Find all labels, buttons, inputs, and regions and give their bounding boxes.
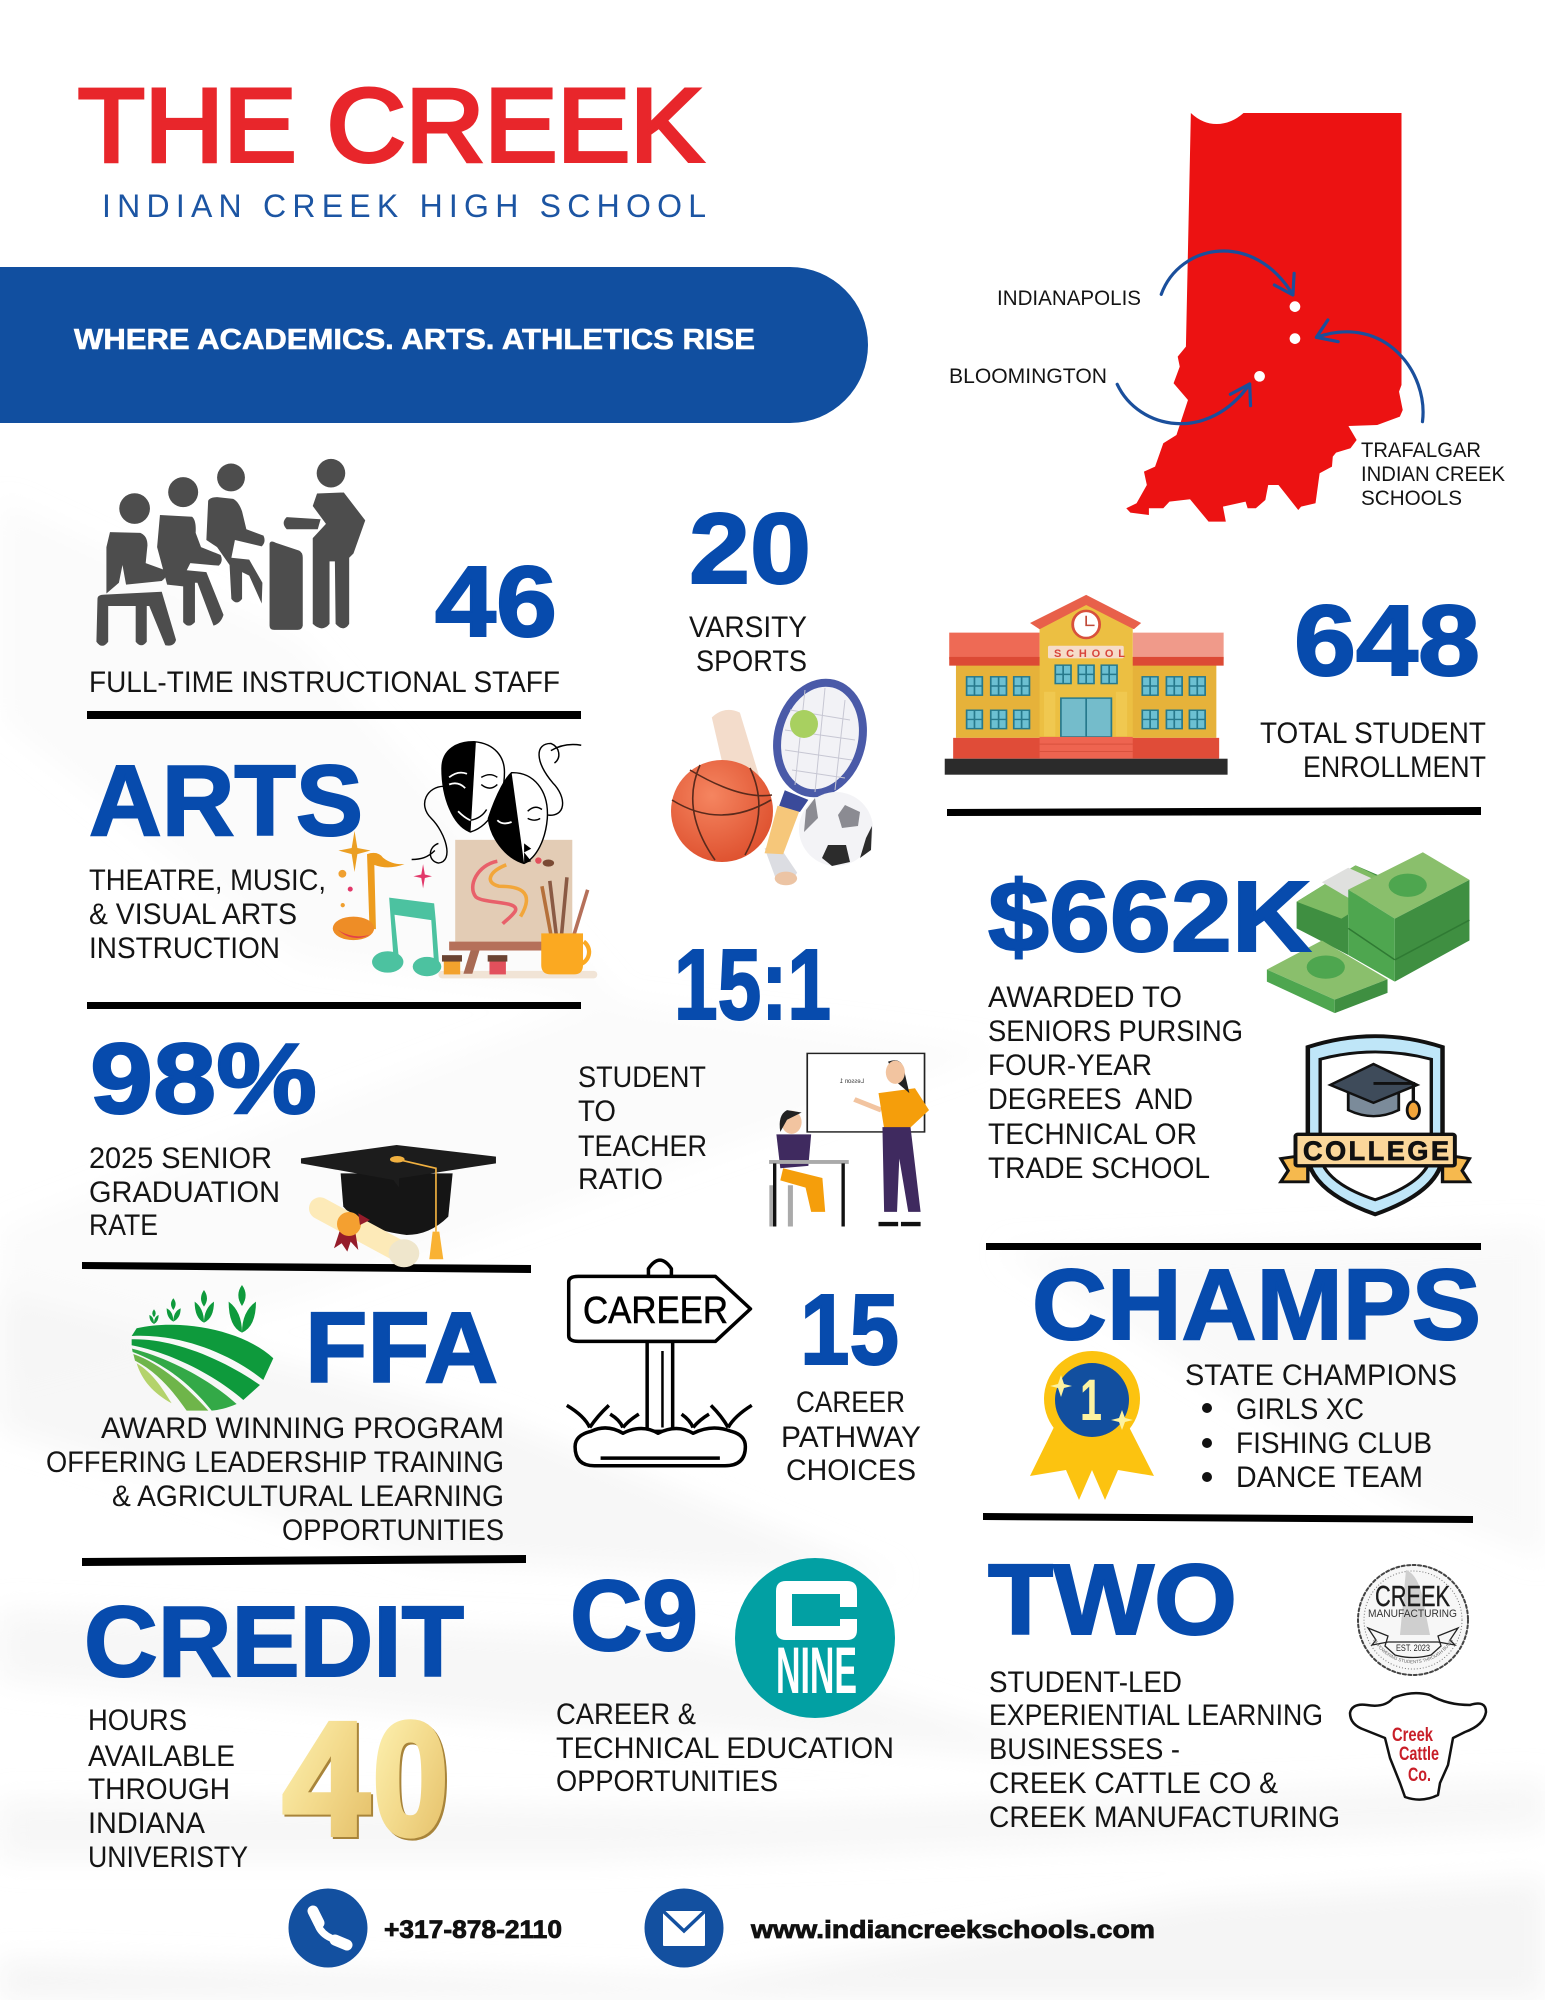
text: FFA description: OPPORTUNITIES: [282, 1514, 504, 1547]
footer: phone: +317-878-2110: [384, 1916, 562, 1944]
text: graduation rate: 2025 SENIOR: [89, 1142, 272, 1175]
icon: classroom: [769, 1053, 929, 1226]
text: student-led businesses: EXPERIENTIAL LEARNING: [989, 1699, 1323, 1732]
stat: 648: 648: [1294, 585, 1480, 697]
text: career and technical education: [556, 1698, 894, 1798]
banner: [0, 267, 868, 423]
text: awarded to seniors: TRADE SCHOOL: [988, 1152, 1210, 1185]
text: total student enrollment: TOTAL STUDENT: [1260, 717, 1486, 750]
text: FFA description: & AGRICULTURAL LEARNING: [112, 1480, 504, 1513]
text: state champions list: DANCE TEAM: [1236, 1461, 1423, 1494]
label: Bloomington: BLOOMINGTON: [949, 365, 1107, 388]
icon: school building: [945, 595, 1228, 775]
text: total student enrollment: ENROLLMENT: [1303, 751, 1486, 784]
text: state champions list: FISHING CLUB: [1236, 1427, 1432, 1460]
text: career pathway choices: CHOICES: [786, 1454, 916, 1487]
icon: seated people and teacher: [96, 459, 365, 646]
icon: sports equipment: [671, 674, 874, 885]
icon: graduation cap and diploma: [301, 1145, 496, 1267]
text: career and technical education: TECHNICAL EDUCATION: [556, 1732, 894, 1765]
icon: gold 4.0: 0: [373, 1689, 448, 1868]
heading: FFA: FFA: [305, 1292, 498, 1404]
text: graduation rate: GRADUATION: [89, 1176, 280, 1209]
text: student-led businesses: STUDENT-LED: [989, 1666, 1182, 1699]
map: Indiana with locations: [949, 113, 1505, 522]
text: varsity sports: VARSITY: [689, 611, 807, 644]
icon: Creek Cattle Co cow head: Cattle: [1399, 1744, 1439, 1765]
icon: Creek Manufacturing seal: CREEK: [1375, 1581, 1450, 1613]
text: varsity sports: SPORTS: [696, 645, 807, 678]
text: state champions list: STATE CHAMPIONS: [1185, 1359, 1457, 1392]
label: Trafalgar: INDIAN CREEK: [1361, 463, 1505, 486]
footer: website: [644, 1888, 1155, 1968]
label: Trafalgar: TRAFALGAR: [1361, 439, 1481, 462]
icon: arts illustration: [333, 742, 597, 978]
icon: Creek Cattle Co cow head: [1350, 1693, 1486, 1800]
arrows: [1117, 251, 1423, 424]
text: arts description: [89, 864, 326, 965]
text: graduation rate: [89, 1142, 280, 1242]
text: awarded to seniors: SENIORS PURSING: [988, 1015, 1243, 1048]
text: arts description: INSTRUCTION: [89, 932, 280, 965]
board text: lesson: Lesson 1: [839, 1079, 864, 1085]
icon: gold 4.0: 4: [283, 1689, 369, 1868]
heading: CHAMPS: CHAMPS: [1032, 1249, 1481, 1361]
text: state champions list: GIRLS XC: [1236, 1393, 1364, 1426]
label: Indianapolis: INDIANAPOLIS: [997, 287, 1141, 310]
text: graduation rate: RATE: [89, 1209, 158, 1242]
text: total student enrollment: [1260, 717, 1486, 784]
footer: website: www.indiancreekschools.com: [750, 1916, 1155, 1944]
icon: Creek Manufacturing seal: EMPOWERING STUDENTS THROUGH BUSINESS: [1373, 1638, 1453, 1664]
icon: C Nine logo: [735, 1558, 895, 1718]
label: Trafalgar: SCHOOLS: [1361, 487, 1462, 510]
text: student to teacher ratio: TEACHER: [578, 1130, 707, 1163]
text: student to teacher ratio: RATIO: [578, 1163, 663, 1196]
stat: $662K: $662K: [988, 861, 1311, 973]
heading: arts: ARTS: [89, 745, 363, 857]
text: awarded to seniors: AWARDED TO: [988, 981, 1182, 1014]
text: awarded to seniors: [988, 981, 1243, 1185]
text: career and technical education: CAREER &: [556, 1698, 696, 1731]
heading: CREDIT: CREDIT: [84, 1586, 464, 1698]
icon: gold 4.0: [283, 1689, 448, 1868]
text: student-led businesses: CREEK CATTLE CO &: [989, 1767, 1278, 1800]
text: awarded to seniors: TECHNICAL OR: [988, 1118, 1197, 1151]
text: student to teacher ratio: [578, 1061, 707, 1196]
stat: 46: 46: [435, 546, 557, 658]
text: credit hours: [88, 1704, 248, 1874]
icon: career sign: [567, 1260, 752, 1466]
icon: farm field logo: [132, 1285, 273, 1411]
state shape: [1126, 113, 1403, 522]
stat: 15:1: 15:1: [674, 929, 831, 1041]
text: student to teacher ratio: STUDENT: [578, 1061, 706, 1094]
icon: first place ribbon: 1: [1080, 1368, 1102, 1433]
text: credit hours: HOURS: [88, 1704, 187, 1737]
text: career pathway choices: CAREER: [796, 1386, 905, 1419]
icon: Creek Manufacturing seal: EST. 2023: [1396, 1643, 1430, 1653]
stat: 15: 15: [800, 1274, 899, 1386]
text: FFA description: AWARD WINNING PROGRAM: [101, 1412, 504, 1445]
text: credit hours: INDIANA: [88, 1807, 205, 1840]
text: arts description: THEATRE, MUSIC,: [89, 864, 326, 897]
text: state champions list: [1185, 1359, 1457, 1494]
icon: C Nine logo: NINE: [776, 1633, 857, 1707]
text: credit hours: UNIVERISTY: [88, 1841, 248, 1874]
label: Trafalgar: [1361, 439, 1505, 510]
stat: C9: C9: [570, 1560, 698, 1672]
icon: Creek Manufacturing seal: MANUFACTURING: [1368, 1608, 1457, 1620]
text: full-time staff: FULL-TIME INSTRUCTIONAL STAFF: [89, 666, 560, 699]
icon: college badge: [1281, 1036, 1469, 1214]
stat: 98%: 98%: [90, 1023, 317, 1135]
icon: Creek Cattle Co cow head: Co.: [1408, 1765, 1431, 1786]
text: career pathway choices: PATHWAY: [781, 1421, 921, 1454]
stat: 20 varsity sports: 20: [689, 493, 811, 605]
icon: Creek Cattle Co cow head: Creek: [1392, 1725, 1433, 1746]
text: varsity sports: [689, 611, 807, 678]
icon: first place ribbon: [1030, 1351, 1154, 1500]
text: student-led businesses: CREEK MANUFACTURING: [989, 1801, 1340, 1834]
subtitle: INDIAN CREEK HIGH SCHOOL: [102, 188, 706, 224]
text: student to teacher ratio: TO: [578, 1095, 616, 1128]
heading: TWO: TWO: [988, 1544, 1237, 1656]
text: student-led businesses: [989, 1666, 1340, 1834]
sign text: SCHOOL: SCHOOL: [1054, 648, 1125, 660]
text: FFA description: [46, 1412, 504, 1547]
location dots: [1254, 301, 1300, 382]
icon: cash stacks: [1267, 852, 1469, 1013]
banner: WHERE ACADEMICS. ARTS. ATHLETICS RISE: [74, 324, 755, 356]
text: career and technical education: OPPORTUNITIES: [556, 1765, 778, 1798]
icon: Creek Manufacturing seal: [1357, 1564, 1469, 1676]
text: credit hours: THROUGH: [88, 1773, 230, 1806]
text: awarded to seniors: DEGREES AND: [988, 1083, 1193, 1116]
text: credit hours: AVAILABLE: [88, 1740, 235, 1773]
title: THE CREEK: [78, 68, 703, 184]
sign text: CAREER: CAREER: [583, 1290, 728, 1332]
footer: phone: [288, 1888, 562, 1968]
badge text: COLLEGE: COLLEGE: [1303, 1136, 1449, 1166]
text: career pathway choices: [781, 1386, 921, 1487]
text: arts description: & VISUAL ARTS: [89, 898, 297, 931]
text: awarded to seniors: FOUR-YEAR: [988, 1049, 1152, 1082]
text: FFA description: OFFERING LEADERSHIP TRAINING: [46, 1446, 504, 1479]
text: student-led businesses: BUSINESSES -: [989, 1733, 1180, 1766]
